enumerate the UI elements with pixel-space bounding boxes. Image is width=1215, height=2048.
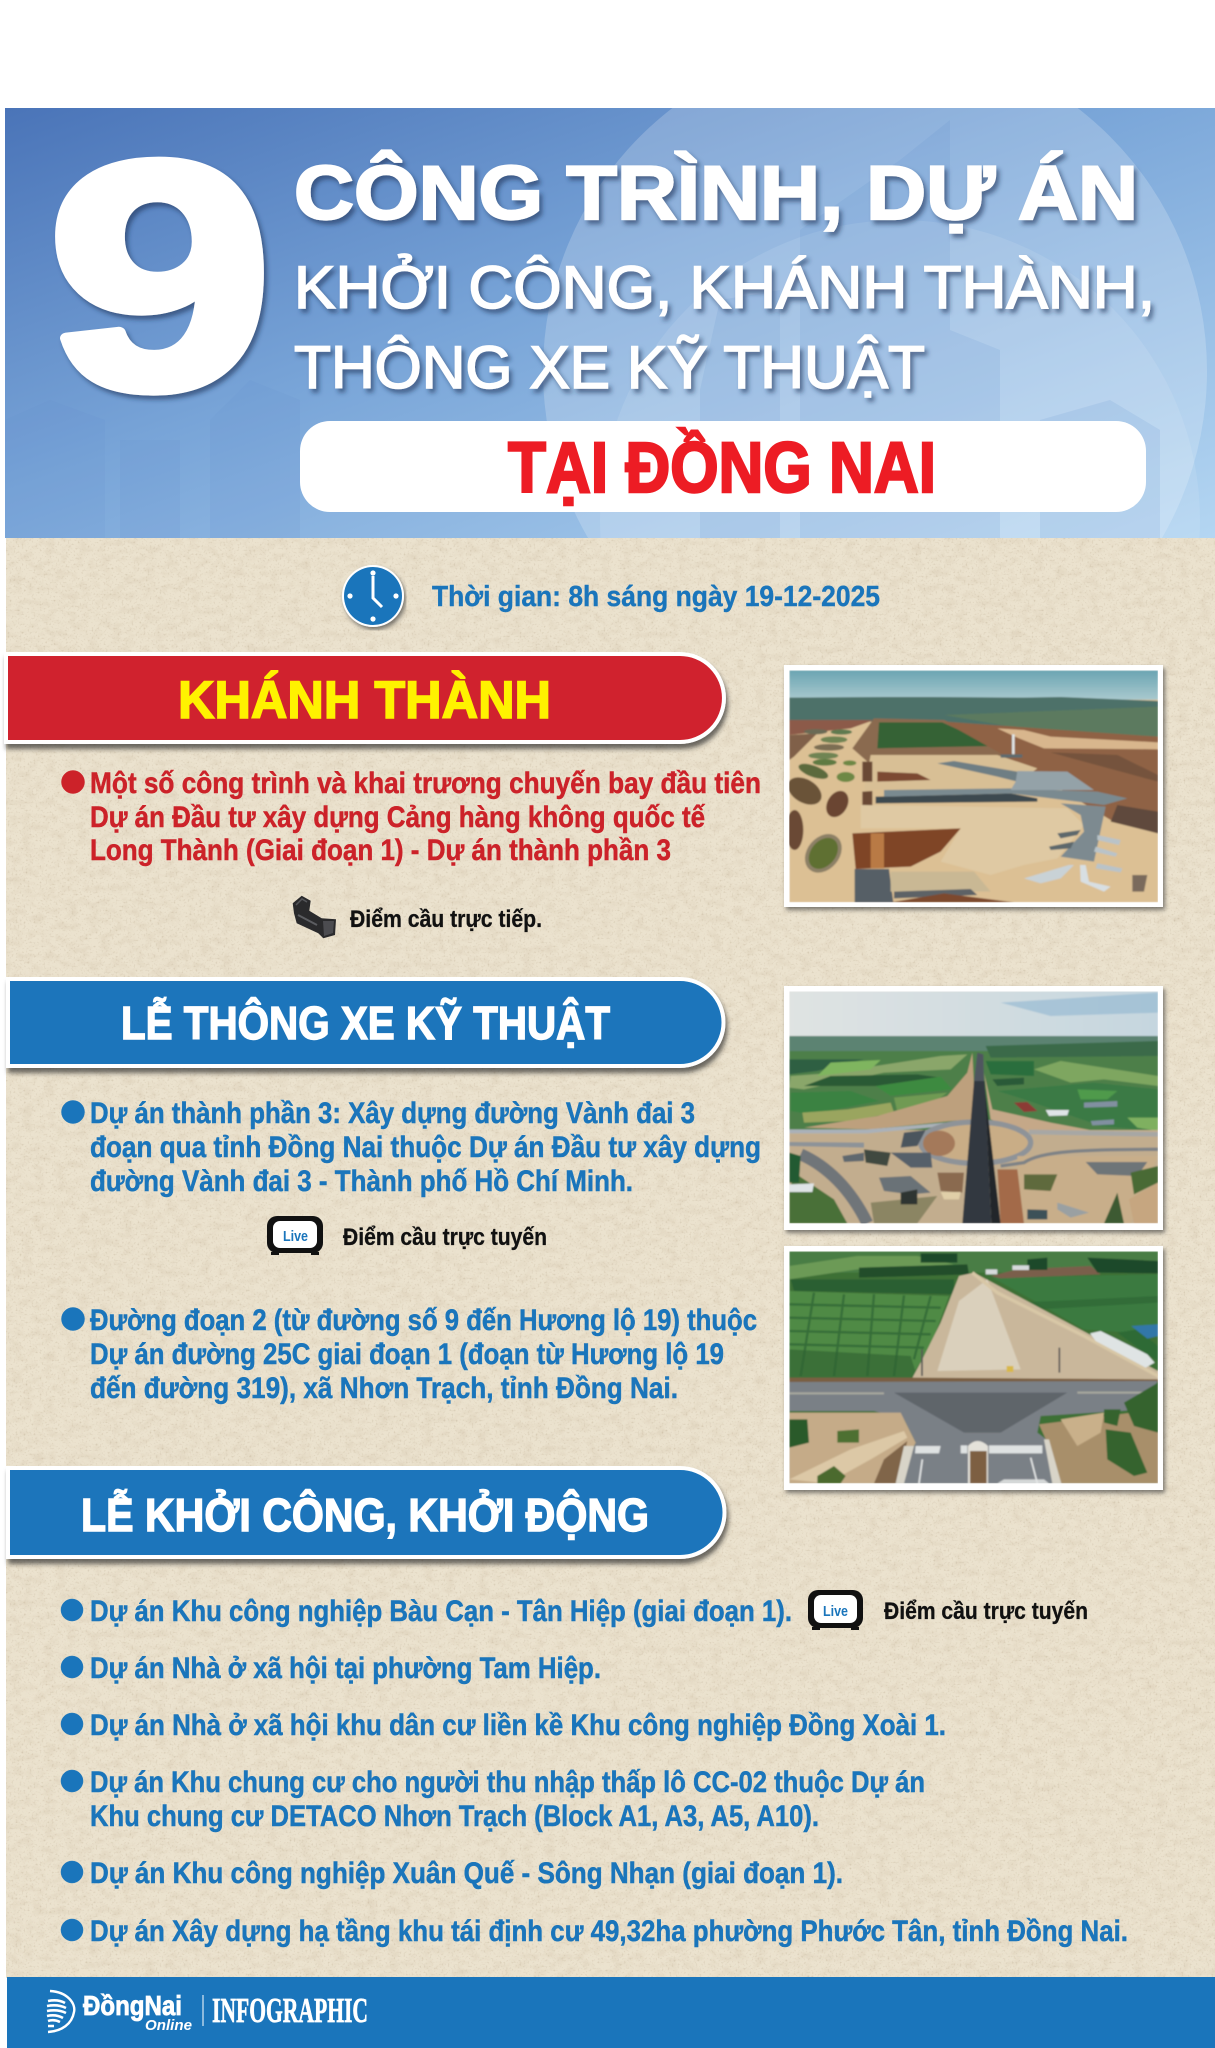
project: Long Thành airport: Một số công trình và khai trương chuyến bay đầu tiên bbox=[90, 767, 761, 800]
project: Long Thành airport bbox=[62, 767, 761, 867]
icon: live TV: Live bbox=[283, 1228, 308, 1245]
project: Vành đai 3: Dự án thành phần 3: Xây dựng đường Vành đai 3 bbox=[90, 1097, 695, 1130]
logo wordmark: ĐồngNai bbox=[83, 1990, 182, 2021]
section heading: Lễ khởi công, khởi động: LỄ KHỞI CÔNG, KHỞI ĐỘNG bbox=[81, 1489, 649, 1541]
icon: live TV: Live bbox=[823, 1603, 848, 1620]
project: đường 25C: đến đường 319), xã Nhơn Trạch, tỉnh Đồng Nai. bbox=[90, 1372, 678, 1405]
photo: đường 25C intersection bbox=[784, 1246, 1163, 1490]
online point label: Điểm cầu trực tuyến bbox=[884, 1598, 1088, 1625]
project: Vành đai 3: đoạn qua tỉnh Đồng Nai thuộc Dự án Đầu tư xây dựng bbox=[90, 1131, 761, 1164]
project list bbox=[61, 1595, 1128, 1948]
logo subtext: Online bbox=[145, 2017, 192, 2034]
project: Long Thành airport: Long Thành (Giai đoạn 1) - Dự án thành phần 3 bbox=[90, 834, 671, 867]
infographic label: INFOGRAPHIC bbox=[212, 1991, 368, 2030]
header banner bbox=[5, 108, 1215, 538]
event time: Thời gian: 8h sáng ngày 19-12-2025 bbox=[432, 581, 880, 613]
project: đường 25C bbox=[62, 1304, 757, 1405]
location pill: TẠI ĐỒNG NAI bbox=[508, 429, 936, 508]
project: đường 25C: Dự án đường 25C giai đoạn 1 (đoạn từ Hương lộ 19 bbox=[90, 1338, 724, 1371]
photo: ring road 3 bbox=[784, 986, 1163, 1230]
section heading: Khánh thành bbox=[6, 654, 724, 742]
item: DETACO: Dự án Khu chung cư cho người thu nhập thấp lô CC-02 thuộc Dự án bbox=[90, 1766, 925, 1799]
live point label: Điểm cầu trực tiếp. bbox=[350, 906, 542, 933]
paper background bbox=[6, 538, 1215, 1978]
item: DETACO bbox=[61, 1766, 925, 1833]
icon: video camera bbox=[293, 896, 336, 938]
icon: Đồng Nai logo bbox=[47, 1991, 74, 2032]
footer bbox=[7, 1977, 1215, 2048]
item: Xuân Quế - Sông Nhạn: Dự án Khu công nghiệp Xuân Quế - Sông Nhạn (giai đoạn 1). bbox=[90, 1857, 843, 1890]
project: đường 25C: Đường đoạn 2 (từ đường số 9 đến Hương lộ 19) thuộc bbox=[90, 1304, 757, 1337]
project: Vành đai 3: đường Vành đai 3 - Thành phố Hồ Chí Minh. bbox=[90, 1165, 633, 1198]
section heading: Lễ thông xe kỹ thuật: LỄ THÔNG XE KỸ THUẬT bbox=[121, 997, 610, 1049]
section heading: Khánh thành: KHÁNH THÀNH bbox=[178, 670, 551, 730]
item: DETACO: Khu chung cư DETACO Nhơn Trạch (Block A1, A3, A5, A10). bbox=[90, 1800, 819, 1833]
title: KHỞI CÔNG, KHÁNH THÀNH, bbox=[294, 254, 1155, 321]
item: Đồng Xoài 1: Dự án Nhà ở xã hội khu dân cư liền kề Khu công nghiệp Đồng Xoài 1. bbox=[90, 1709, 946, 1742]
section heading: Lễ khởi công, khởi động bbox=[8, 1468, 724, 1557]
project: Vành đai 3 bbox=[62, 1097, 761, 1198]
icon: clock bbox=[342, 565, 404, 627]
project: Long Thành airport: Dự án Đầu tư xây dựng Cảng hàng không quốc tế bbox=[90, 801, 705, 834]
icon: live TV bbox=[267, 1216, 323, 1255]
section heading: Lễ thông xe kỹ thuật bbox=[8, 979, 723, 1066]
photo: Long Thành airport bbox=[783, 665, 1163, 907]
title bbox=[294, 151, 1155, 401]
icon: live TV bbox=[808, 1590, 863, 1630]
item: Bàu Cạn - Tân Hiệp: Dự án Khu công nghiệp Bàu Cạn - Tân Hiệp (giai đoạn 1). bbox=[90, 1595, 792, 1628]
title: THÔNG XE KỸ THUẬT bbox=[294, 334, 925, 401]
location pill bbox=[300, 421, 1146, 512]
title: CÔNG TRÌNH, DỰ ÁN bbox=[294, 151, 1138, 236]
online point label: Điểm cầu trực tuyến bbox=[343, 1224, 547, 1251]
big number 9: 9 bbox=[48, 97, 272, 456]
item: Tam Hiệp: Dự án Nhà ở xã hội tại phường Tam Hiệp. bbox=[90, 1652, 601, 1685]
